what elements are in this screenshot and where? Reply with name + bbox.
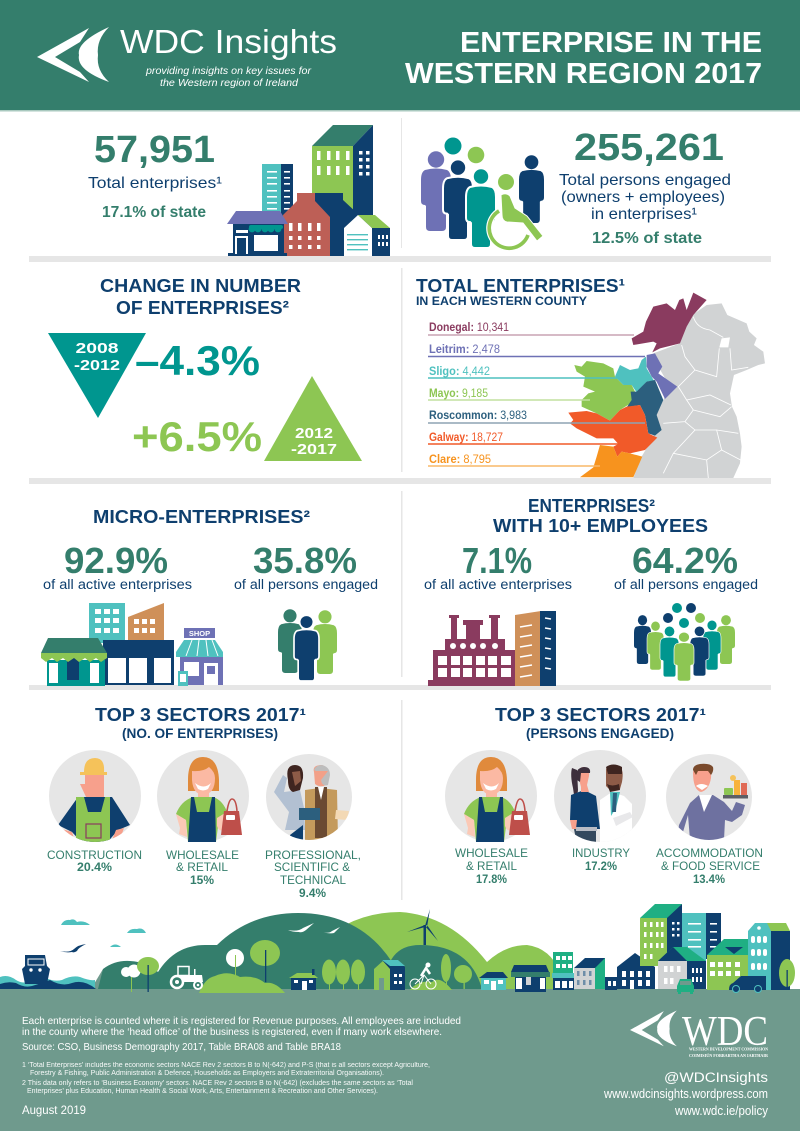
county: Mayo label: Mayo: 9,185 (429, 388, 488, 400)
icon: crowd of people (634, 603, 735, 681)
caption: of all persons engaged (614, 577, 758, 592)
footer (22, 1009, 769, 1118)
WDC logo (630, 1009, 768, 1058)
section dividers (29, 118, 771, 900)
label: construction: CONSTRUCTION (47, 848, 142, 862)
triangle down 2008-2012: -2012 (74, 357, 120, 374)
icon: WDC logo arrows (37, 27, 109, 82)
heading: TOP 3 SECTORS 2017¹ (95, 705, 306, 725)
label: wholesale and retail: 17.8% (476, 872, 507, 886)
icon: city buildings (227, 125, 390, 256)
triangle up 2012-2017: 2012 (295, 425, 333, 442)
date: August 2019 (22, 1105, 86, 1117)
heading: WITH 10+ EMPLOYEES (493, 516, 708, 536)
county: Donegal label: Donegal: 10,341 (429, 322, 509, 334)
triangle up 2012-2017: -2017 (291, 441, 337, 458)
county: Sligo (615, 357, 654, 392)
subheading: (PERSONS ENGAGED) (526, 726, 674, 741)
county: Sligo label: Sligo: 4,442 (429, 366, 490, 378)
county: Leitrim (647, 353, 677, 399)
header banner (0, 0, 800, 112)
icon: cottage (289, 969, 318, 990)
logo tagline (145, 65, 311, 89)
icon: wind turbine (407, 909, 438, 945)
triangle up 2012-2017 (264, 376, 362, 461)
icon: shops: SHOP (189, 629, 210, 638)
county: Galway (568, 405, 657, 457)
label: total persons engaged: Total persons engaged (559, 172, 731, 189)
label: professional, scientific and technical: 9.4% (299, 886, 326, 900)
panel: enterprises with 10+ employees (424, 496, 758, 686)
contact links (603, 1070, 769, 1118)
navy rowhouse (605, 977, 617, 990)
county: Galway label: Galway: 18,727 (429, 432, 503, 444)
icon: tractor (171, 966, 203, 989)
triangle down 2008-2012 (48, 333, 146, 418)
waves and ship (0, 955, 96, 989)
stat: 64.2%: 64.2% (632, 540, 738, 581)
heading: CHANGE IN NUMBER (100, 275, 301, 296)
icon: seagull (60, 944, 86, 952)
label: wholesale and retail: WHOLESALE (455, 846, 528, 860)
teal tower (682, 913, 706, 961)
label: construction (47, 848, 142, 874)
caption: of all persons engaged (234, 577, 378, 592)
label: wholesale and retail: & RETAIL (176, 860, 228, 874)
label: wholesale and retail: 15% (190, 873, 214, 887)
stat: 7.1%: 7.1% (462, 540, 532, 581)
county: Roscommon label: Roscommon: 3,983 (429, 410, 527, 422)
tall teal house (748, 923, 772, 990)
label: total persons engaged: (owners + employees) (561, 189, 725, 206)
label: total enterprises: Total enterprises¹ (88, 175, 222, 192)
footnotes: 2 This data only refers to ‘Business Economy’ sectors. NACE Rev 2 sectors B to N(-642) (excludes the same sectors as ‘Total (22, 1080, 413, 1087)
panel: total enterprises (88, 125, 390, 256)
county: Leitrim label: Leitrim: 2,478 (429, 344, 500, 356)
label: accommodation and food service (656, 846, 763, 886)
WDC logo: WDC (682, 1009, 768, 1055)
methodology note (22, 1015, 461, 1038)
contact links: www.wdc.ie/policy (674, 1104, 769, 1118)
label: wholesale and retail (455, 846, 528, 886)
county: Clare (580, 445, 642, 477)
WDC logo: WESTERN DEVELOPMENT COMMISSION (689, 1046, 768, 1052)
heading: TOP 3 SECTORS 2017¹ (495, 705, 706, 725)
heading: OF ENTERPRISES² (116, 297, 289, 318)
icon: professional workers (266, 754, 352, 842)
label: professional, scientific and technical (265, 848, 361, 900)
icon: ship (22, 955, 50, 984)
panel: micro-enterprises (41, 507, 378, 686)
footer background (0, 989, 800, 1131)
icon: factory (428, 611, 556, 686)
icon: group of people with wheelchair user (421, 138, 544, 248)
footer notes (22, 1015, 461, 1117)
label: wholesale and retail (166, 848, 239, 887)
stat: 92.9%: 92.9% (64, 540, 168, 581)
panel: total enterprises by county (416, 275, 765, 478)
county: Clare label: Clare: 8,795 (429, 454, 491, 466)
stat: -4.3%: –4.3% (135, 337, 260, 384)
county: Mayo (574, 361, 635, 421)
gable green house (707, 939, 748, 956)
label: total persons engaged (559, 172, 731, 223)
caption: of all active enterprises (424, 577, 572, 592)
green tower (640, 904, 682, 918)
icon: waiter with tray (666, 754, 752, 840)
stat: 35.8%: 35.8% (253, 540, 357, 581)
label: wholesale and retail: & RETAIL (466, 859, 517, 873)
footnotes: Forestry & Fishing, Public Administration & Defence, Households as Employers and Extraterritorial Organisations). (30, 1070, 384, 1077)
contact links: www.wdcinsights.wordpress.com (603, 1087, 768, 1101)
label: accommodation and food service: & FOOD SERVICE (661, 859, 760, 873)
panel: change in number of enterprises (48, 275, 362, 461)
heading: TOTAL ENTERPRISES¹ (416, 275, 625, 296)
label: professional, scientific and technical: SCIENTIFIC & (274, 860, 350, 874)
logo tagline: the Western region of Ireland (160, 77, 299, 89)
icon: cyclist (410, 963, 436, 989)
triangle down 2008-2012: 2008 (76, 340, 118, 357)
share of state: 17.1% of state (102, 204, 206, 221)
small shop (479, 972, 508, 978)
subheading: IN EACH WESTERN COUNTY (416, 294, 587, 308)
footnotes: Enterprises’ plus Education, Human Health & Social Work, Arts, Entertainment & Recreation and Other Services). (27, 1088, 378, 1095)
WDC Insights wordmark: WDC Insights (120, 23, 337, 60)
terrace (574, 958, 605, 968)
source: Source: CSO, Business Demography 2017, Table BRA08 and Table BRA18 (22, 1041, 341, 1053)
icon: green car (677, 979, 694, 994)
label: accommodation and food service: ACCOMMODATION (656, 846, 763, 860)
trees (121, 940, 472, 992)
stat: 255,261: 255,261 (574, 127, 724, 169)
caption: of all active enterprises (43, 577, 192, 592)
subheading: (NO. OF ENTERPRISES) (122, 726, 278, 741)
methodology note: Each enterprise is counted where it is registered for Revenue purposes. All employees are included (22, 1015, 461, 1027)
landscape illustration (0, 904, 795, 994)
label: professional, scientific and technical: PROFESSIONAL, (265, 848, 361, 862)
stat: 57,951: 57,951 (94, 129, 215, 171)
heading (100, 275, 301, 318)
icon: farmhouse (374, 960, 405, 990)
label: industry: 17.2% (585, 859, 617, 873)
title: WESTERN REGION 2017 (405, 58, 762, 90)
heading (493, 496, 708, 536)
label: wholesale and retail: WHOLESALE (166, 848, 239, 862)
icon: delivery van (729, 976, 766, 992)
icon: industry workers (554, 750, 646, 845)
county: Roscommon (627, 380, 663, 436)
icon: wholesale and retail worker (445, 750, 537, 842)
footnotes (22, 1062, 430, 1095)
icon: wholesale and retail worker (157, 750, 249, 842)
share of state: 12.5% of state (592, 230, 702, 247)
contact links: @WDCInsights (664, 1070, 768, 1085)
storefront (511, 965, 549, 972)
label: industry: INDUSTRY (572, 846, 630, 860)
town buildings (479, 904, 790, 992)
seagulls (288, 923, 340, 933)
grey house (658, 947, 706, 989)
county: Donegal (632, 293, 707, 352)
heading: ENTERPRISES² (528, 496, 655, 516)
logo tagline: providing insights on key issues for (145, 65, 311, 77)
icon: construction worker (49, 750, 141, 845)
map of Ireland with western counties (568, 293, 765, 478)
stat: +6.5%: +6.5% (132, 413, 262, 460)
title: ENTERPRISE IN THE (460, 27, 762, 59)
footnotes: 1 ‘Total Enterprises’ includes the economic sectors NACE Rev 2 sectors B to N(-642) and P-S (that is all sectors except Agriculture, (22, 1062, 430, 1069)
icon: three people (278, 609, 337, 681)
panel: persons engaged (421, 127, 731, 248)
icon: shops (41, 603, 223, 686)
hills (91, 912, 560, 993)
green block (553, 952, 573, 990)
panel: top 3 sectors by persons engaged (445, 705, 763, 886)
WDC logo: COIMISIÚN FORBARTHA AN IARTHAIR (689, 1053, 768, 1058)
clouds (61, 919, 146, 947)
label: total persons engaged: in enterprises¹ (591, 206, 697, 223)
label: construction: 20.4% (77, 860, 112, 874)
label: professional, scientific and technical: TECHNICAL (280, 873, 346, 887)
heading: MICRO-ENTERPRISES² (93, 507, 310, 527)
label: industry (572, 846, 630, 873)
panel: top 3 sectors by enterprises (47, 705, 361, 900)
label: accommodation and food service: 13.4% (693, 872, 725, 886)
methodology note: in the county where the ‘head office’ of the business is registered, even if many work elsewhere. (22, 1026, 442, 1038)
county leader lines (428, 335, 645, 466)
title (405, 27, 762, 90)
icon: right-hand tree (779, 959, 795, 990)
